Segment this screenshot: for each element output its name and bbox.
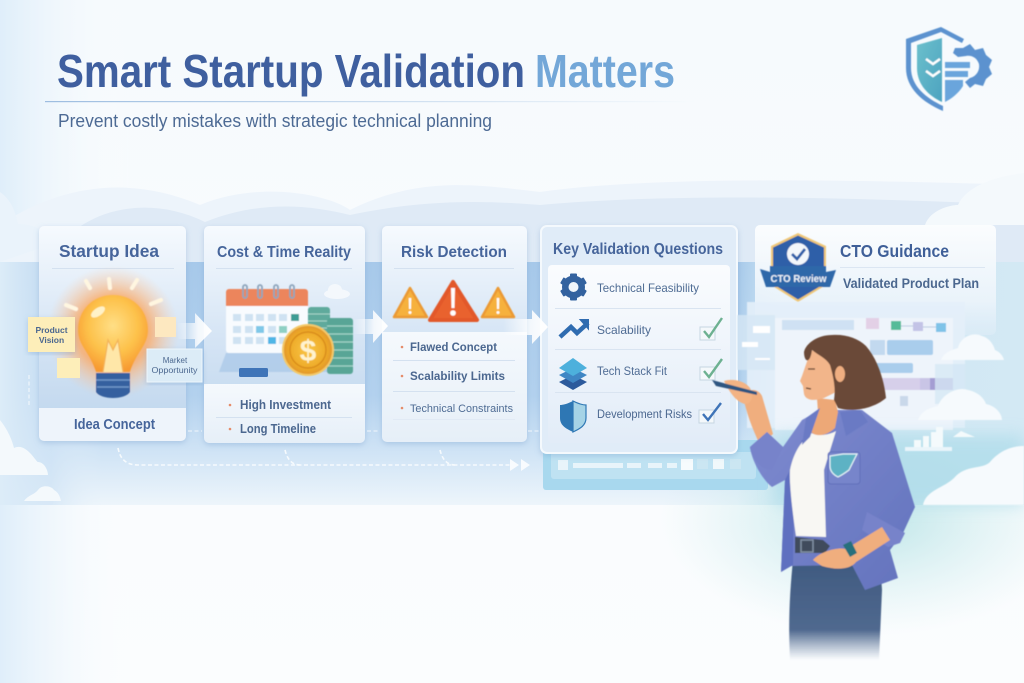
flow arrowheads <box>510 459 530 471</box>
pants <box>789 560 882 660</box>
subtitle: Prevent costly mistakes with strategic technical planning <box>58 111 492 131</box>
jacket <box>750 410 915 590</box>
icon: growth arrow <box>560 320 588 337</box>
icon: layers stack <box>559 358 587 390</box>
checklist card <box>548 265 730 443</box>
heading: cost and time: Cost & Time Reality <box>217 244 351 261</box>
badge: CTO review <box>760 233 836 302</box>
watch <box>843 541 857 557</box>
arrow: cost to risk <box>353 310 388 343</box>
lower right teal band <box>775 435 1024 505</box>
icon: checkbox development risks <box>699 403 721 423</box>
subheading: validated product plan: Validated Product Plan <box>843 276 979 291</box>
arrow: idea to cost <box>177 313 212 348</box>
heading: risk detection: Risk Detection <box>401 244 507 261</box>
panel: key validation questions <box>541 226 737 453</box>
icon: small cloud <box>324 284 350 299</box>
lower strip: cost bullets: High Investment <box>240 398 332 412</box>
checklist label: tech stack fit: Tech Stack Fit <box>597 364 668 378</box>
strip below validation panel <box>543 440 768 490</box>
checklist label: development risks: Development Risks <box>597 407 692 421</box>
neck <box>810 398 838 435</box>
person: CTO presenter <box>712 335 915 660</box>
dashed flow line <box>29 375 540 471</box>
lower strip: idea concept: Idea Concept <box>74 417 155 433</box>
raised hand <box>724 380 752 404</box>
lower strip: cost bullets <box>204 384 365 443</box>
note: product vision: Vision <box>39 335 64 345</box>
arrows between panels <box>177 310 548 348</box>
panel: risk detection <box>382 226 527 442</box>
raised arm <box>743 390 773 445</box>
icon: light bulb <box>47 266 179 398</box>
badge: CTO review: CTO Review <box>770 273 827 285</box>
collar <box>802 408 868 445</box>
icon: checkbox scalability <box>700 318 722 340</box>
lowered hand and forearm <box>813 527 890 569</box>
heading: startup idea: Startup Idea <box>59 241 159 261</box>
note: small yellow <box>57 358 80 378</box>
lower strip: cost bullets: Long Timeline <box>240 422 316 436</box>
lower strip: risk bullets <box>382 332 527 442</box>
note: product vision <box>28 317 75 352</box>
note: product vision: Product <box>35 325 68 335</box>
hair <box>804 335 886 410</box>
pen <box>712 380 757 395</box>
title rule <box>45 101 695 102</box>
ear <box>835 366 845 382</box>
note: small cream <box>155 317 176 337</box>
belt <box>795 537 830 553</box>
icon: warning triangles <box>394 282 514 320</box>
icon: coin stacks: $ <box>300 335 317 368</box>
cloud cluster right <box>918 334 1024 505</box>
arrow: risk to questions <box>503 310 548 344</box>
icon: shield <box>560 401 586 432</box>
t-shirt <box>790 431 836 537</box>
heading: key validation questions: Key Validation Questions <box>553 241 723 258</box>
heading: CTO guidance: CTO Guidance <box>840 241 949 261</box>
mini bar chart <box>905 427 975 451</box>
lower strip: risk bullets: Flawed Concept <box>410 340 497 354</box>
title: Smart Startup Validation <box>57 45 525 97</box>
sleeve cuffs <box>750 432 905 547</box>
icon: gear <box>560 274 587 300</box>
checklist label: technical feasibility: Technical Feasibility <box>597 281 699 295</box>
pocket badge <box>828 452 860 484</box>
dashboard and gantt behind person <box>737 302 965 430</box>
icon: blue bar <box>239 368 268 377</box>
icon: coin stacks <box>283 307 353 375</box>
note: market opportunity <box>147 349 202 382</box>
icon: shield and gear logo <box>906 27 992 111</box>
panel: cost and time reality <box>204 226 365 443</box>
note: market opportunity: Market <box>163 356 188 365</box>
lower strip: risk bullets: Technical Constraints <box>410 403 513 415</box>
title: Matters <box>535 45 675 97</box>
panel: startup idea <box>28 226 186 441</box>
icon: checkbox tech stack <box>700 359 722 380</box>
icon: calendar <box>219 285 330 372</box>
lower strip: idea concept <box>39 408 186 441</box>
panel: CTO guidance <box>755 225 996 335</box>
face <box>800 350 840 400</box>
note: market opportunity: Opportunity <box>152 366 198 375</box>
jacket left front strip and folds <box>781 440 806 572</box>
checklist label: scalability: Scalability <box>597 323 651 337</box>
eye and mouth <box>806 369 815 389</box>
lower strip: risk bullets: Scalability Limits <box>410 369 505 383</box>
